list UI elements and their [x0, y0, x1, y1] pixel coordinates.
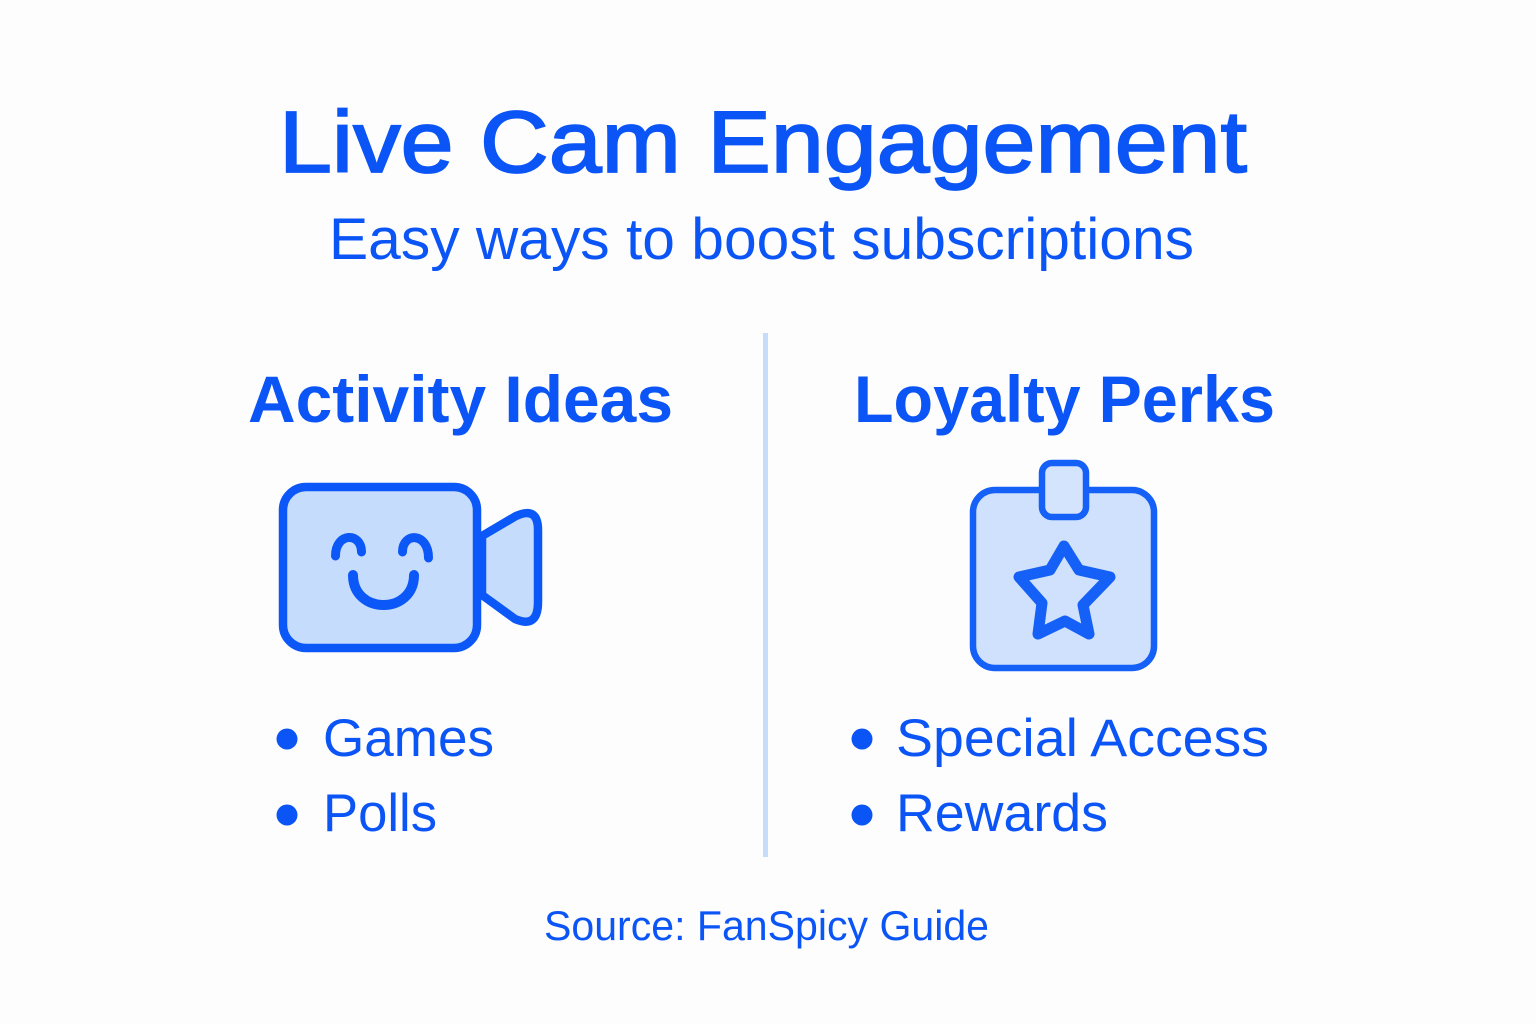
- bullet list: loyalty perks: Special Access: [896, 709, 1269, 768]
- bullet list: activity ideas: Polls: [323, 784, 437, 843]
- title: Live Cam Engagement: [279, 94, 1247, 191]
- heading: loyalty perks: Loyalty Perks: [854, 362, 1275, 436]
- heading: activity ideas: Activity Ideas: [248, 362, 673, 436]
- icon: smiling video camera: [283, 487, 538, 648]
- panel: loyalty perks: [852, 362, 1275, 843]
- subtitle: Easy ways to boost subscriptions: [329, 207, 1194, 272]
- bullet list: activity ideas: [276, 709, 494, 843]
- panel: activity ideas: [248, 362, 673, 843]
- icon: star badge: [973, 463, 1154, 668]
- bullet list: activity ideas: Games: [323, 709, 494, 768]
- source note: Source: FanSpicy Guide: [544, 902, 989, 949]
- bullet list: loyalty perks: [852, 709, 1269, 843]
- center divider: [763, 333, 768, 857]
- bullet list: loyalty perks: Rewards: [896, 784, 1108, 843]
